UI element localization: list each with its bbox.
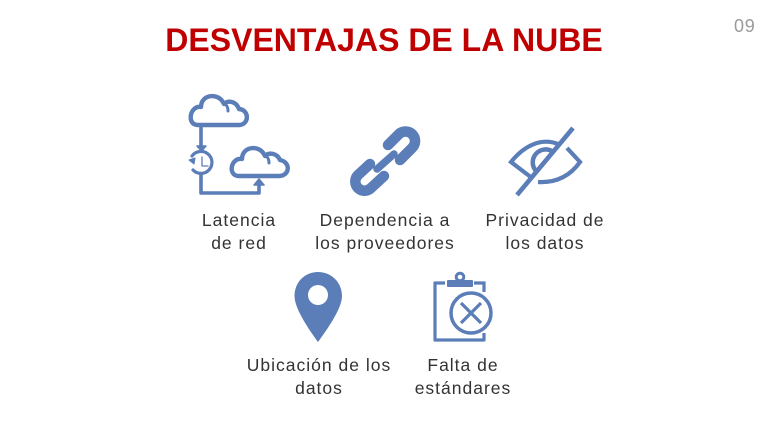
label: ubicación de los datos: datos bbox=[295, 378, 343, 398]
label: ubicación de los datos bbox=[247, 355, 391, 398]
label: latencia de red: Latencia bbox=[202, 210, 276, 230]
page number: 09 bbox=[734, 16, 756, 36]
label: privacidad de los datos bbox=[485, 210, 605, 253]
label: dependencia a los proveedores bbox=[315, 210, 455, 253]
icon: chain link bbox=[355, 131, 415, 191]
label: privacidad de los datos: Privacidad de bbox=[485, 210, 605, 230]
label: falta de estándares: estándares bbox=[415, 378, 511, 398]
label: falta de estándares bbox=[415, 355, 511, 398]
icon: crossed-out eye bbox=[511, 128, 580, 195]
label: dependencia a los proveedores: los proveedores bbox=[315, 233, 455, 253]
label: latencia de red bbox=[202, 210, 276, 253]
label: privacidad de los datos: los datos bbox=[505, 233, 585, 253]
icon: clipboard with X bbox=[435, 273, 491, 340]
title: DESVENTAJAS DE LA NUBE bbox=[165, 22, 603, 58]
label: dependencia a los proveedores: Dependencia a bbox=[320, 210, 450, 230]
label: latencia de red: de red bbox=[211, 233, 267, 253]
icon: location pin bbox=[294, 272, 342, 342]
label: falta de estándares: Falta de bbox=[427, 355, 499, 375]
icon: clouds with latency clock bbox=[189, 96, 288, 193]
label: ubicación de los datos: Ubicación de los bbox=[247, 355, 391, 375]
